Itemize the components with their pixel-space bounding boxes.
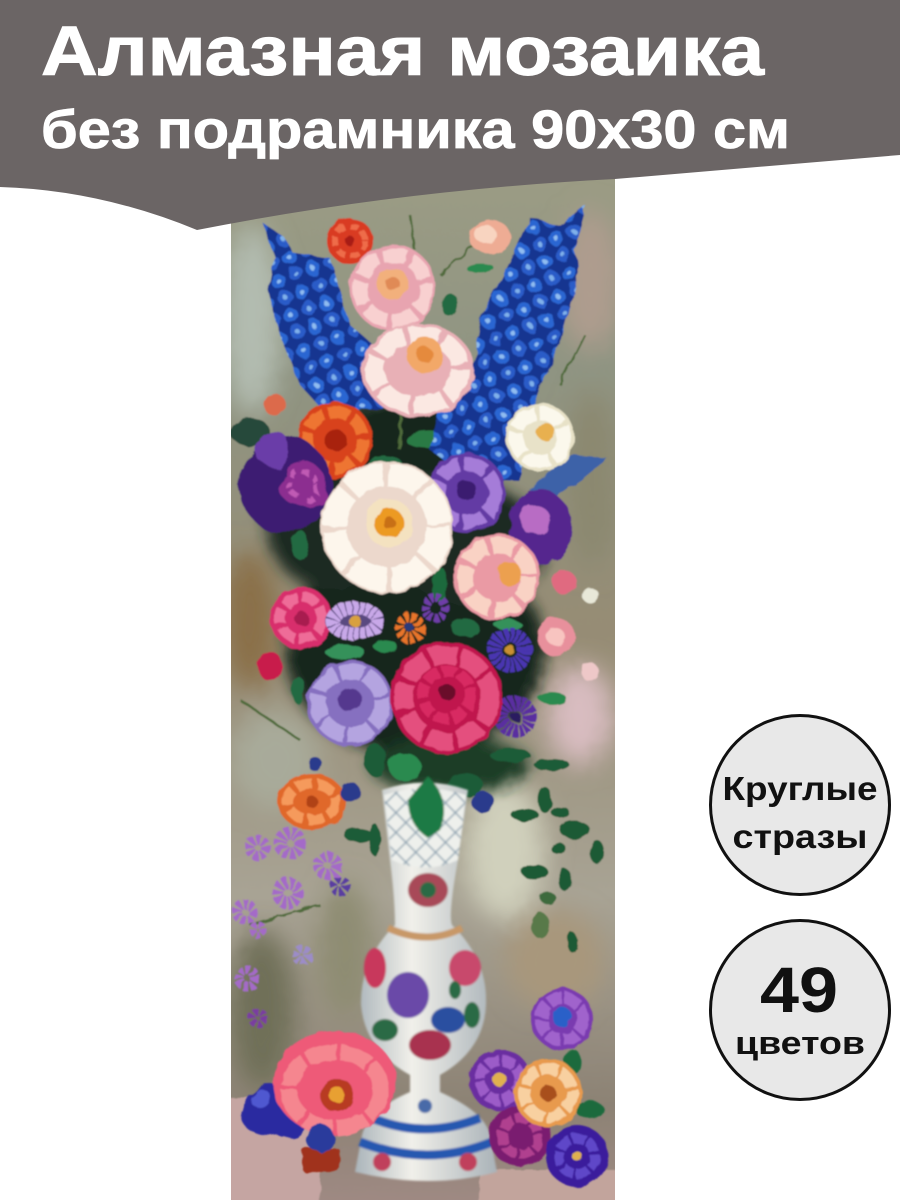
vase lattice neck	[384, 788, 466, 868]
flower: blue-violet aster	[495, 635, 525, 665]
blue delphinium tip, lower right	[529, 454, 606, 496]
badge: 49 colours: 49	[760, 954, 838, 1026]
flower: small red bud	[264, 394, 286, 416]
vase blue base rings	[360, 1118, 492, 1155]
green leaves below the bouquet	[344, 744, 570, 856]
badge: round rhinestones: Круглые	[722, 770, 878, 807]
badge: 49 colours	[710, 920, 890, 1100]
flower: small orange rose	[327, 218, 373, 264]
blue delphinium spike, right	[430, 205, 586, 482]
flower: blue, bottom left	[240, 1086, 304, 1138]
vase leaf overlapping the neck	[408, 776, 444, 838]
flower: small purple daisy	[425, 598, 445, 618]
red box on the table	[302, 1124, 340, 1172]
porcelain vase	[355, 776, 497, 1181]
flower: lavender peony	[307, 660, 393, 746]
trailing vine, right of the vase	[511, 787, 604, 952]
flower: small orange daisy	[400, 618, 420, 638]
flower: pink rose, top	[350, 245, 436, 331]
flower: violet cluster, left	[239, 430, 331, 533]
title banner	[0, 0, 900, 230]
flower: peach rose, lower right	[514, 1059, 582, 1127]
flower: crimson peony	[391, 642, 503, 754]
painting lower layer: flowers on the table	[240, 988, 608, 1187]
stems at the top and sides	[240, 215, 585, 925]
flower: pale pink rose	[362, 323, 474, 417]
flower: orange rose	[297, 402, 373, 478]
blue delphinium spike, left	[262, 222, 388, 418]
badge: 49 colours: цветов	[735, 1025, 865, 1061]
flower: red bud	[258, 651, 282, 681]
foliage behind the bouquet	[265, 395, 545, 793]
lilac wildflowers, left	[237, 833, 346, 1024]
leaves, lower right	[565, 1049, 604, 1119]
flower: orange rose, lower left	[278, 774, 346, 830]
flower: purple, lower right	[469, 1049, 531, 1111]
flower: peach-pink rose	[454, 534, 540, 620]
painting: floral bouquet in a vase	[220, 160, 630, 1200]
flower: purple rose	[426, 453, 506, 533]
flower: large white peony	[321, 461, 453, 593]
badge: round rhinestones	[710, 716, 890, 894]
title: line 1: Алмазная мозаика	[41, 12, 765, 90]
painting upper layer: background and bouquet	[220, 160, 630, 1200]
flower: pink poppy	[273, 1031, 397, 1135]
vase body	[355, 782, 497, 1181]
title: line 2: без подрамника 90х30 см	[41, 100, 790, 160]
flower: peach bud	[469, 220, 511, 254]
flower: small pink roses right	[537, 570, 599, 681]
painting background	[220, 160, 630, 1200]
flower: pink rose, left	[270, 587, 332, 649]
small blue buds by the vase neck	[308, 757, 494, 813]
flower: white rose, right	[506, 403, 574, 471]
flower: blue-violet, top right of table	[531, 988, 593, 1050]
badge: round rhinestones: стразы	[732, 818, 868, 855]
flower: magenta, lower right	[489, 1105, 551, 1167]
vase foot decoration	[373, 1099, 477, 1171]
green leaves in the bouquet	[230, 263, 566, 704]
vase gold collar	[388, 928, 462, 937]
flower: purple aster	[502, 703, 530, 731]
flower: lilac daisy	[325, 603, 385, 639]
flower: deep blue, lower right	[546, 1125, 608, 1187]
flower: purple cluster, right	[508, 490, 572, 566]
vase floral decoration	[364, 873, 481, 1060]
